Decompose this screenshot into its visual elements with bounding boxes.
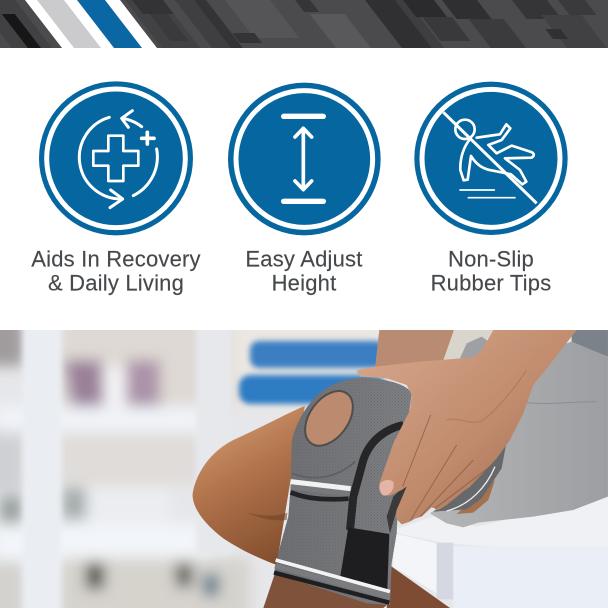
photo: knee brace — [0, 310, 608, 608]
icon: no slip — [414, 82, 568, 235]
thigh — [193, 406, 450, 608]
shorts — [430, 330, 608, 527]
caption: height — [245, 246, 363, 296]
blurred shelves — [0, 330, 254, 608]
blurred shelf post — [23, 320, 232, 608]
icon: recovery — [39, 81, 193, 235]
caption: height: Easy Adjust — [245, 246, 363, 272]
header banner — [0, 0, 608, 48]
caption: height: Height — [272, 270, 336, 296]
caption: recovery: & Daily Living — [48, 270, 184, 296]
hand — [357, 330, 577, 524]
caption: recovery: Aids In Recovery — [31, 246, 201, 272]
knee brace — [274, 378, 420, 605]
caption: rubber tips: Non-Slip — [448, 246, 534, 272]
icon: height adjust — [228, 83, 381, 235]
caption: rubber tips: Rubber Tips — [431, 270, 551, 296]
caption: rubber tips — [431, 246, 551, 296]
banner camouflage pattern — [0, 0, 608, 48]
white stool — [393, 497, 608, 608]
caption: recovery — [31, 246, 201, 296]
banner diagonal stripes — [25, 0, 157, 48]
blurred blue towels — [239, 341, 385, 404]
arm — [375, 330, 493, 368]
